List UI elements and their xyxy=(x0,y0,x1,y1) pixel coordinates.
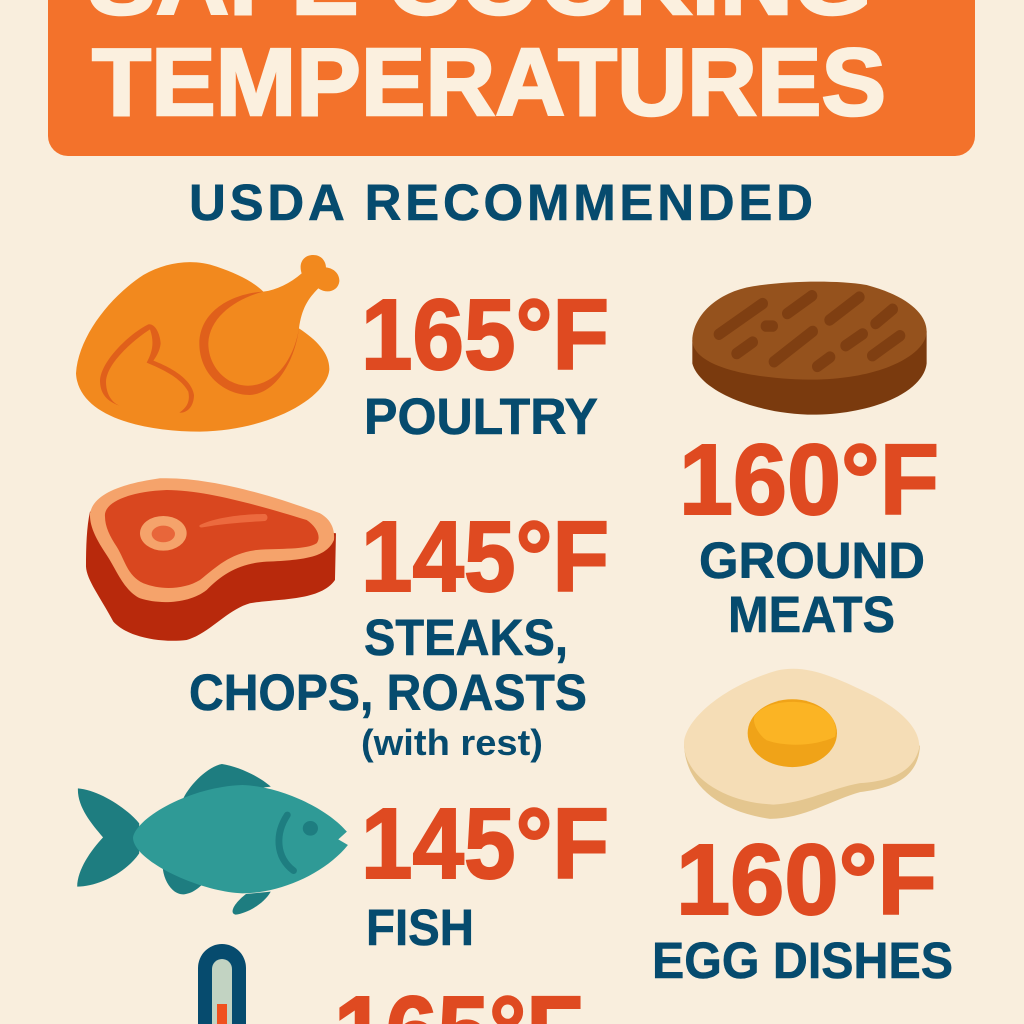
subtitle: USDA RECOMMENDED xyxy=(189,174,813,231)
icon: thermometer xyxy=(198,944,246,1024)
title: second line: TEMPERATURES xyxy=(92,29,886,136)
steak note: (with rest) xyxy=(361,722,543,763)
ground meats temperature: 160°F xyxy=(679,424,939,536)
fish label: FISH xyxy=(366,899,474,956)
steak label line two: CHOPS, ROASTS xyxy=(189,664,587,721)
title banner xyxy=(48,0,975,156)
egg dishes temperature: 160°F xyxy=(676,824,937,936)
ground meats label line two: MEATS xyxy=(728,586,895,643)
steak temperature: 145°F xyxy=(361,501,609,613)
steak label line one: STEAKS, xyxy=(364,609,568,666)
icon: fried egg xyxy=(684,669,920,819)
ground meats label line one: GROUND xyxy=(699,532,925,589)
poultry label: POULTRY xyxy=(364,388,598,445)
poultry temperature: 165°F xyxy=(361,279,609,391)
icon: steak xyxy=(86,478,336,641)
egg dishes label: EGG DISHES xyxy=(652,932,953,989)
icon: roast chicken xyxy=(76,255,339,432)
icon: burger patty xyxy=(692,282,927,415)
fish temperature: 145°F xyxy=(361,788,609,900)
icon: fish xyxy=(77,764,348,915)
